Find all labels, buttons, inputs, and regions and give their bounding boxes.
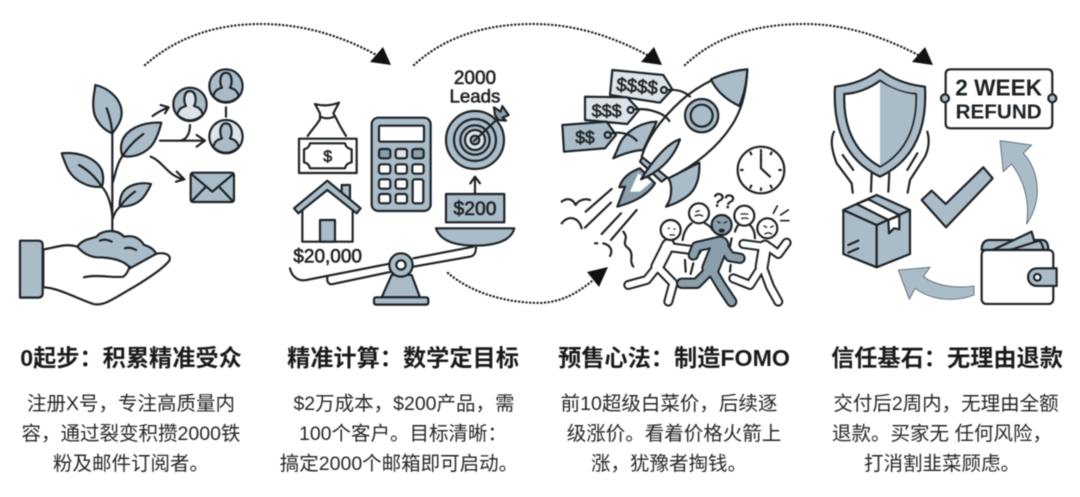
icon: top leaf bbox=[93, 85, 122, 133]
icon: alarm lines bbox=[773, 206, 789, 221]
arrow: wallet to refund bbox=[1000, 141, 1037, 224]
icon: parcel box bbox=[843, 195, 910, 267]
icon: refund ticket: 2 WEEK bbox=[955, 75, 1043, 101]
icon: price tag three dollars bbox=[585, 97, 639, 124]
icon: rocket bbox=[612, 69, 747, 207]
icon: price tag three dollars: $$$ bbox=[592, 101, 622, 121]
arrow: lower dotted arc from scale to crowd bbox=[448, 267, 608, 303]
icon: refund ticket bbox=[941, 69, 1056, 128]
label: 2000 leads bbox=[450, 68, 500, 107]
text block: step 2: $2万成本，$200产品，需 bbox=[293, 393, 515, 415]
arrows to followers and mail bbox=[151, 105, 226, 182]
heading: step 4: 信任基石：无理由退款 bbox=[831, 345, 1063, 371]
icon: shield bbox=[835, 69, 925, 177]
icon: soil mound bbox=[77, 231, 156, 268]
icon: scale stand bbox=[374, 253, 428, 305]
icon: price tag two dollars bbox=[562, 122, 616, 152]
icon: calculator bbox=[372, 118, 431, 211]
icon: follower avatar 1 bbox=[173, 88, 207, 121]
label: product price box bbox=[446, 194, 504, 222]
heading: step 1: 0起步：积累精准受众 bbox=[20, 345, 242, 371]
text block: step 4: 退款。买家无 任何风险， bbox=[832, 423, 1052, 445]
icon: wallet bbox=[982, 232, 1057, 304]
icon: hand with sprout and followers bbox=[20, 69, 243, 304]
icon: dollar bill bbox=[299, 139, 357, 173]
arrow: wallet to parcel bbox=[898, 267, 974, 299]
text block: step 3: 级涨价。看着价格火箭上 bbox=[567, 423, 781, 445]
label: question marks: ?? bbox=[711, 190, 736, 214]
icon: left running figure bbox=[628, 220, 697, 302]
icon: cost balance scale and calculator bbox=[290, 68, 514, 305]
heading: step 3: 预售心法：制造FOMO bbox=[558, 345, 790, 371]
icon: supporting hands bbox=[832, 132, 929, 193]
text block: step 4 bbox=[832, 393, 1059, 475]
icon: scale pan bbox=[436, 228, 514, 246]
text block: step 4: 打消割韭菜顾虑。 bbox=[864, 453, 1020, 475]
icon: follower avatar 2 bbox=[209, 69, 243, 103]
arrow: dotted arc step 3 to 4 bbox=[685, 24, 933, 65]
text block: step 1: 粉及邮件订阅者。 bbox=[53, 453, 209, 475]
arrow: dotted arc step 2 to 3 bbox=[414, 24, 662, 65]
icon: left leaf bbox=[62, 153, 103, 187]
label: house price: $20,000 bbox=[293, 246, 362, 267]
icon: house bbox=[294, 181, 361, 242]
icon: small leaf bbox=[120, 183, 151, 207]
text block: step 1: 容，通过裂变积攒2000铁 bbox=[22, 423, 240, 445]
icon: scale beam bbox=[290, 247, 476, 284]
text block: step 1: 注册X号，专注高质量内 bbox=[27, 393, 235, 415]
text block: step 4: 交付后2周内，无理由全额 bbox=[833, 393, 1059, 415]
icon: follower avatar 3 bbox=[209, 120, 243, 153]
label: 2000 leads: 2000 bbox=[454, 68, 496, 89]
icon: rocket, price tags and rushing crowd bbox=[562, 69, 789, 302]
icon: right running figure bbox=[733, 218, 787, 302]
arrow: dotted arc step 1 to 2 bbox=[145, 24, 391, 65]
arrow: up from price to target bbox=[470, 177, 480, 193]
text block: step 2: 100个客户。目标清晰： bbox=[299, 423, 507, 445]
text block: step 2 bbox=[280, 393, 518, 475]
text block: step 3 bbox=[561, 393, 781, 475]
icon: back crowd figures bbox=[683, 203, 755, 274]
icon: price tag four dollars: $$$$ bbox=[616, 74, 659, 98]
icon: refund ticket: REFUND bbox=[956, 100, 1042, 123]
icon: check mark bbox=[922, 167, 993, 227]
label: product price box: $200 bbox=[453, 199, 496, 220]
icon: clock bbox=[738, 147, 784, 193]
heading: step 2: 精准计算：数学定目标 bbox=[287, 345, 519, 371]
icon: right leaf bbox=[121, 123, 161, 157]
icon: target with arrow bbox=[446, 106, 509, 169]
text block: step 2: 搞定2000个邮箱即可启动。 bbox=[280, 453, 518, 475]
icon: plant stem bbox=[102, 133, 123, 230]
text block: step 3: 前10超级白菜价，后续逐 bbox=[561, 393, 777, 415]
label: 2000 leads: Leads bbox=[450, 86, 500, 107]
icon: money bag bbox=[308, 103, 346, 136]
icon: dollar bill: $ bbox=[323, 149, 332, 166]
icon: speed lines and smoke bbox=[562, 189, 637, 267]
text block: step 1 bbox=[22, 393, 240, 475]
icon: price tag two dollars: $$ bbox=[575, 128, 595, 148]
icon: cuff bbox=[20, 241, 43, 298]
icon: central worried figure bbox=[682, 215, 740, 302]
icon: open hand bbox=[43, 245, 170, 304]
text block: step 3: 涨，犹豫者掏钱。 bbox=[591, 453, 747, 475]
icon: guarantee shield, refund and wallet cycle bbox=[832, 69, 1057, 304]
icon: price tag four dollars bbox=[610, 70, 672, 103]
icon: mail envelope bbox=[191, 173, 234, 202]
